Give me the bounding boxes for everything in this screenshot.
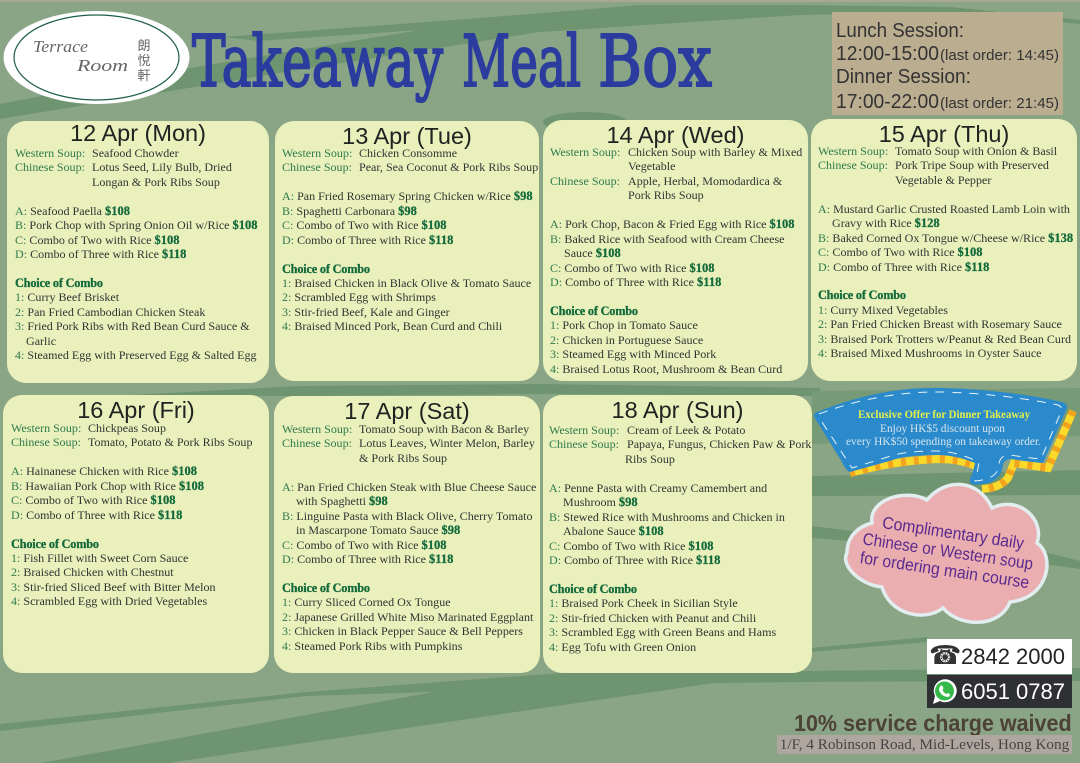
panel: 14 Apr bbox=[543, 120, 808, 381]
menu text: 12 Apr: Western Soup: bbox=[15, 146, 85, 160]
logo: 軒 bbox=[137, 65, 151, 84]
menu text: 16 Apr bbox=[11, 421, 252, 608]
heading: 18 Apr: 18 Apr (Sun) bbox=[612, 397, 743, 423]
title: Meal bbox=[462, 20, 581, 103]
menu text: 13 Apr: Western Soup: bbox=[282, 146, 352, 160]
menu text: 12 Apr: Garlic bbox=[26, 334, 56, 348]
heading: 13 Apr: 13 Apr (Tue) bbox=[342, 123, 472, 149]
menu text: 16 Apr: D: Combo of Three with Rice $118 bbox=[11, 508, 182, 522]
menu text: 14 Apr: Chinese Soup: bbox=[550, 174, 620, 188]
menu text: 18 Apr: 1: Braised Pork Cheek in Sicilian Style bbox=[549, 596, 738, 610]
menu text: 12 Apr: 2: Pan Fried Cambodian Chicken Steak bbox=[15, 305, 205, 319]
callout: complimentary soup cloud: Chinese or Western soup bbox=[861, 529, 1034, 574]
heading: 15 Apr: 15 Apr (Thu) bbox=[879, 121, 1009, 147]
menu text: 13 Apr: Choice of Combo bbox=[282, 262, 370, 276]
callout: dinner takeaway offer: every HK$50 spending on takeaway order. bbox=[846, 435, 1041, 448]
panel: 15 Apr bbox=[811, 119, 1077, 381]
menu text: 14 Apr: A: Pork Chop, Bacon & Fried Egg with Rice $108 bbox=[550, 217, 795, 231]
menu text: 17 Apr: Choice of Combo bbox=[282, 581, 370, 595]
heading: 12 Apr: 12 Apr (Mon) bbox=[70, 120, 206, 146]
menu text: 12 Apr: 3: Fried Pork Ribs with Red Bean Curd Sauce & bbox=[15, 319, 250, 333]
session hours: Lunch Session: bbox=[836, 20, 964, 42]
menu text: 16 Apr: 2: Braised Chicken with Chestnut bbox=[11, 565, 174, 579]
menu text: 12 Apr: Seafood Chowder bbox=[92, 146, 179, 160]
menu text: 12 Apr: B: Pork Chop with Spring Onion Oil w/Rice $108 bbox=[15, 218, 258, 232]
menu text: 14 Apr: 1: Pork Chop in Tomato Sauce bbox=[550, 318, 698, 332]
menu text: 13 Apr: C: Combo of Two with Rice $108 bbox=[282, 218, 446, 232]
menu text: 17 Apr: B: Linguine Pasta with Black Olive, Cherry Tomato bbox=[282, 509, 533, 523]
logo: 悅 bbox=[137, 50, 151, 69]
session hours: Dinner Session: bbox=[836, 66, 971, 88]
menu text: 17 Apr: & Pork Ribs Soup bbox=[359, 451, 447, 465]
logo: 朗 bbox=[137, 35, 151, 54]
menu text: 17 Apr bbox=[282, 422, 536, 653]
menu text: 18 Apr: Chinese Soup: bbox=[549, 437, 619, 451]
menu text: 13 Apr: A: Pan Fried Rosemary Spring Chicken w/Rice $98 bbox=[282, 189, 533, 203]
menu text: 17 Apr: Tomato Soup with Bacon & Barley bbox=[359, 422, 529, 436]
menu text: 18 Apr: Cream of Leek & Potato bbox=[627, 423, 745, 437]
menu text: 17 Apr: 4: Steamed Pork Ribs with Pumpkins bbox=[282, 639, 462, 653]
panel: 13 Apr bbox=[275, 121, 539, 381]
menu text: 13 Apr: D: Combo of Three with Rice $118 bbox=[282, 233, 453, 247]
callout: complimentary soup cloud: for ordering main course bbox=[859, 548, 1031, 592]
menu text: 14 Apr: 2: Chicken in Portuguese Sauce bbox=[550, 333, 703, 347]
callout: dinner takeaway offer: Enjoy HK$5 discount upon bbox=[880, 422, 1005, 435]
logo: Room bbox=[76, 56, 128, 75]
menu text: 16 Apr: Choice of Combo bbox=[11, 536, 99, 550]
menu text: 13 Apr: 3: Stir-fried Beef, Kale and Ginger bbox=[282, 305, 450, 319]
menu text: 18 Apr: Papaya, Fungus, Chicken Paw & Pork bbox=[627, 437, 811, 451]
session hours: (last order: 14:45) bbox=[940, 48, 1059, 64]
menu text: 13 Apr: Chicken Consomme bbox=[359, 146, 457, 160]
menu text: 15 Apr: Choice of Combo bbox=[818, 288, 906, 302]
menu text: 17 Apr: Lotus Leaves, Winter Melon, Barley bbox=[359, 436, 535, 450]
menu text: 15 Apr: C: Combo of Two with Rice $108 bbox=[818, 245, 982, 259]
menu text: 17 Apr: Chinese Soup: bbox=[282, 436, 352, 450]
menu text: 15 Apr: Tomato Soup with Onion & Basil bbox=[895, 144, 1057, 158]
callout: dinner takeaway offer bbox=[814, 388, 1077, 493]
menu text: 18 Apr: 4: Egg Tofu with Green Onion bbox=[549, 640, 696, 654]
title: Takeaway bbox=[192, 20, 443, 103]
whatsapp number bbox=[927, 675, 1072, 708]
menu text: 18 Apr: Choice of Combo bbox=[549, 582, 637, 596]
menu text: 14 Apr: Pork Ribs Soup bbox=[628, 188, 704, 202]
callout: complimentary soup cloud: Complimentary daily bbox=[881, 513, 1026, 553]
whatsapp number: 6051 0787 bbox=[961, 679, 1065, 704]
session hours bbox=[832, 12, 1063, 115]
menu text: 12 Apr: Longan & Pork Ribs Soup bbox=[92, 175, 220, 189]
menu text: 12 Apr: A: Seafood Paella $108 bbox=[15, 204, 130, 218]
menu text: 14 Apr: 4: Braised Lotus Root, Mushroom & Bean Curd bbox=[550, 362, 782, 376]
menu text: 14 Apr: Apple, Herbal, Momodardica & bbox=[628, 174, 782, 188]
menu text: 15 Apr: D: Combo of Three with Rice $118 bbox=[818, 260, 989, 274]
menu text: 13 Apr bbox=[282, 146, 538, 333]
menu text: 14 Apr: Choice of Combo bbox=[550, 304, 638, 318]
menu text: 18 Apr: 3: Scrambled Egg with Green Beans and Hams bbox=[549, 625, 776, 639]
menu text: 15 Apr bbox=[818, 144, 1073, 360]
menu text: 14 Apr: Vegetable bbox=[628, 159, 676, 173]
menu text: 14 Apr: C: Combo of Two with Rice $108 bbox=[550, 260, 714, 274]
menu text: 15 Apr: Chinese Soup: bbox=[818, 158, 888, 172]
menu text: 14 Apr: Western Soup: bbox=[550, 145, 620, 159]
menu text: 17 Apr: with Spaghetti $98 bbox=[296, 494, 388, 508]
menu text: 12 Apr: D: Combo of Three with Rice $118 bbox=[15, 247, 186, 261]
session hours: (last order: 21:45) bbox=[940, 96, 1059, 112]
menu text: 14 Apr: D: Combo of Three with Rice $118 bbox=[550, 275, 721, 289]
phone number: ☎ bbox=[929, 641, 961, 671]
phone number: 2842 2000 bbox=[961, 644, 1065, 669]
menu text: 14 Apr: B: Baked Rice with Seafood with Cream Cheese bbox=[550, 232, 785, 246]
menu text: 17 Apr: 3: Chicken in Black Pepper Sauce & Bell Peppers bbox=[282, 624, 523, 638]
menu text: 15 Apr: 2: Pan Fried Chicken Breast with Rosemary Sauce bbox=[818, 317, 1062, 331]
session hours: 17:00-22:00 bbox=[836, 91, 939, 113]
menu text: 16 Apr: Tomato, Potato & Pork Ribs Soup bbox=[88, 435, 252, 449]
menu text: 13 Apr: 1: Braised Chicken in Black Olive & Tomato Sauce bbox=[282, 276, 531, 290]
menu text: 12 Apr: Lotus Seed, Lily Bulb, Dried bbox=[92, 160, 232, 174]
menu text: 18 Apr: A: Penne Pasta with Creamy Camembert and bbox=[549, 481, 767, 495]
address: 1/F, 4 Robinson Road, Mid-Levels, Hong Kong bbox=[780, 736, 1069, 753]
menu text: 18 Apr: B: Stewed Rice with Mushrooms and Chicken in bbox=[549, 510, 785, 524]
menu text: 18 Apr: Abalone Sauce $108 bbox=[563, 524, 664, 538]
menu text: 15 Apr: 1: Curry Mixed Vegetables bbox=[818, 303, 948, 317]
menu text: 18 Apr: 2: Stir-fried Chicken with Peanut and Chili bbox=[549, 611, 756, 625]
menu text: 18 Apr: C: Combo of Two with Rice $108 bbox=[549, 538, 714, 552]
menu text: 15 Apr: Western Soup: bbox=[818, 144, 888, 158]
menu text: 15 Apr: B: Baked Corned Ox Tongue w/Cheese w/Rice $138 bbox=[818, 231, 1073, 245]
title bbox=[192, 20, 712, 103]
service charge note: 10% service charge waived bbox=[794, 710, 1072, 736]
menu text: 16 Apr: C: Combo of Two with Rice $108 bbox=[11, 493, 176, 507]
menu text: 15 Apr: 4: Braised Mixed Mushrooms in Oyster Sauce bbox=[818, 346, 1042, 360]
menu text: 16 Apr: Chickpeas Soup bbox=[88, 421, 166, 435]
callout: complimentary soup cloud bbox=[844, 482, 1049, 624]
menu text: 18 Apr bbox=[549, 423, 812, 654]
menu text: 15 Apr: A: Mustard Garlic Crusted Roasted Lamb Loin with bbox=[818, 202, 1070, 216]
menu text: 15 Apr: Vegetable & Pepper bbox=[895, 173, 991, 187]
menu text: 14 Apr: 3: Steamed Egg with Minced Pork bbox=[550, 347, 716, 361]
heading: 16 Apr: 16 Apr (Fri) bbox=[77, 397, 195, 423]
menu text: 16 Apr: B: Hawaiian Pork Chop with Rice $108 bbox=[11, 479, 204, 493]
menu text: 17 Apr: 2: Japanese Grilled White Miso Marinated Eggplant bbox=[282, 610, 533, 624]
menu text: 15 Apr: Pork Tripe Soup with Preserved bbox=[895, 158, 1049, 172]
menu text: 12 Apr: 4: Steamed Egg with Preserved Egg & Salted Egg bbox=[15, 348, 257, 362]
menu text: 12 Apr: C: Combo of Two with Rice $108 bbox=[15, 233, 180, 247]
menu text: 12 Apr: Choice of Combo bbox=[15, 276, 103, 290]
menu text: 13 Apr: B: Spaghetti Carbonara $98 bbox=[282, 204, 417, 218]
menu text: 12 Apr: Chinese Soup: bbox=[15, 160, 85, 174]
menu text: 16 Apr: 1: Fish Fillet with Sweet Corn Sauce bbox=[11, 551, 188, 565]
menu text: 17 Apr: 1: Curry Sliced Corned Ox Tongue bbox=[282, 595, 451, 609]
menu text: 12 Apr bbox=[15, 146, 258, 362]
session hours: 12:00-15:00 bbox=[836, 43, 939, 65]
logo: Terrace bbox=[33, 37, 88, 56]
menu text: 16 Apr: 3: Stir-fried Sliced Beef with Bitter Melon bbox=[11, 580, 216, 594]
panel: 12 Apr bbox=[7, 121, 269, 383]
menu text: 16 Apr: 4: Scrambled Egg with Dried Vegetables bbox=[11, 594, 207, 608]
menu text: 12 Apr: 1: Curry Beef Brisket bbox=[15, 290, 119, 304]
phone number bbox=[927, 639, 1072, 674]
menu text: 17 Apr: A: Pan Fried Chicken Steak with Blue Cheese Sauce bbox=[282, 480, 536, 494]
panel: 18 Apr bbox=[543, 395, 812, 673]
menu text: 13 Apr: Chinese Soup: bbox=[282, 160, 352, 174]
menu text: 14 Apr bbox=[550, 145, 802, 376]
logo bbox=[4, 11, 190, 104]
menu text: 17 Apr: Western Soup: bbox=[282, 422, 352, 436]
menu text: 13 Apr: Pear, Sea Coconut & Pork Ribs Soup bbox=[359, 160, 538, 174]
menu text: 16 Apr: Chinese Soup: bbox=[11, 435, 81, 449]
menu text: 18 Apr: D: Combo of Three with Rice $118 bbox=[549, 553, 720, 567]
callout: dinner takeaway offer: Exclusive Offer for Dinner Takeaway bbox=[858, 409, 1030, 421]
menu text: 14 Apr: Sauce $108 bbox=[564, 246, 621, 260]
heading: 14 Apr: 14 Apr (Wed) bbox=[606, 122, 745, 148]
menu text: 16 Apr: A: Hainanese Chicken with Rice $108 bbox=[11, 464, 197, 478]
menu text: 18 Apr: Ribs Soup bbox=[625, 452, 675, 466]
panel: 17 Apr bbox=[274, 396, 540, 673]
menu text: 16 Apr: Western Soup: bbox=[11, 421, 81, 435]
menu text: 17 Apr: D: Combo of Three with Rice $118 bbox=[282, 552, 453, 566]
menu text: 17 Apr: in Mascarpone Tomato Sauce $98 bbox=[296, 523, 460, 537]
menu text: 17 Apr: C: Combo of Two with Rice $108 bbox=[282, 538, 446, 552]
menu text: 18 Apr: Western Soup: bbox=[549, 423, 619, 437]
menu text: 14 Apr: Chicken Soup with Barley & Mixed bbox=[628, 145, 802, 159]
menu text: 13 Apr: 4: Braised Minced Pork, Bean Curd and Chili bbox=[282, 319, 502, 333]
menu text: 15 Apr: 3: Braised Pork Trotters w/Peanut & Red Bean Curd bbox=[818, 332, 1071, 346]
menu text: 18 Apr: Mushroom $98 bbox=[563, 495, 638, 509]
heading: 17 Apr: 17 Apr (Sat) bbox=[344, 398, 470, 424]
menu text: 15 Apr: Gravy with Rice $128 bbox=[832, 216, 940, 230]
panel: 16 Apr bbox=[3, 395, 269, 673]
menu text: 13 Apr: 2: Scrambled Egg with Shrimps bbox=[282, 290, 436, 304]
